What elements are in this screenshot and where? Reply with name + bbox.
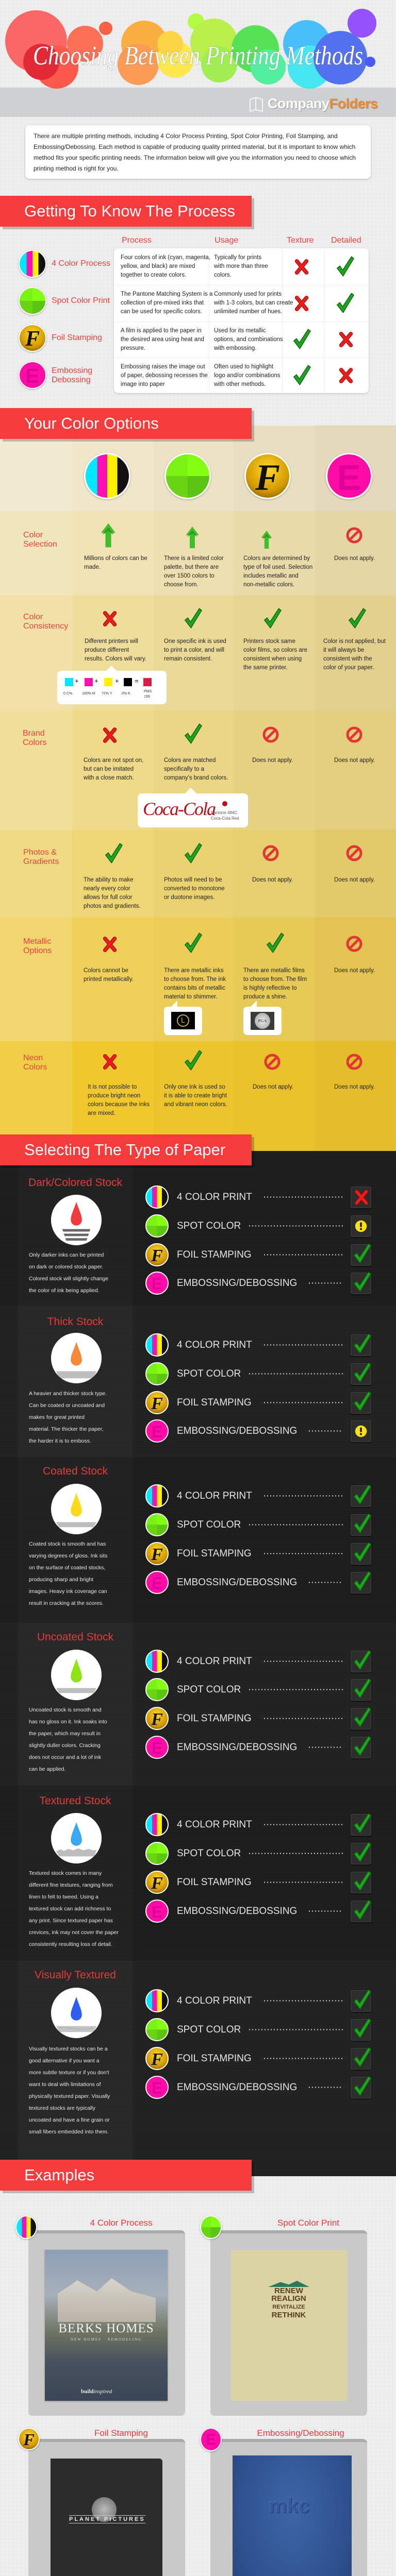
process comparison table: Commonly used for prints [214, 291, 282, 297]
process comparison table: with embossing. [214, 345, 256, 351]
row: brand colors: Does not apply. [334, 757, 375, 764]
process comparison table: Used for its metallic [214, 328, 266, 334]
paper: Textured Stock: EMBOSSING/DEBOSSING [177, 1906, 297, 1917]
paper: Visually Textured: FOIL STAMPING [177, 2053, 252, 2064]
example: Spot Color Print: REALIGN [271, 2294, 306, 2303]
row: photos & gradients: Photos will need to be [164, 877, 222, 883]
color option method icons [83, 452, 373, 501]
process comparison table: Embossing raises the image out [121, 364, 205, 370]
paper: Uncoated Stock: the paper, which may result in [29, 1731, 101, 1737]
row: neon colors: colors because the inks [88, 1101, 150, 1108]
paper: Textured Stock: FOIL STAMPING [177, 1877, 252, 1888]
row: neon colors: Does not apply. [253, 1084, 293, 1090]
process comparison table: The Pantone Matching System is a [121, 291, 212, 297]
paper: Visually Textured: textured stocks are typically [29, 2105, 95, 2111]
process row labels with icons: E [26, 365, 39, 387]
process row labels with icons: Debossing [52, 376, 91, 384]
paper: Coated Stock: 4 COLOR PRINT [177, 1490, 252, 1501]
row: brand colors: Does not apply. [252, 757, 293, 764]
paper: Thick Stock: makes for great printed [29, 1414, 85, 1420]
row: photos & gradients: Does not apply. [252, 877, 293, 883]
paper: Thick Stock: EMBOSSING/DEBOSSING [177, 1426, 297, 1436]
row: photos & gradients: The ability to make [84, 877, 134, 883]
row: metallic options: contains bits of metallic [164, 985, 225, 991]
paper: Uncoated Stock: F [151, 1710, 163, 1729]
paper: Visually Textured: good alternative if you want a [29, 2058, 100, 2064]
paper: Uncoated Stock: Uncoated Stock [37, 1631, 113, 1643]
paper: Uncoated Stock [29, 1631, 372, 1772]
process comparison table: options, and combinations [214, 336, 283, 343]
row: neon colors: it is able to create bright [164, 1093, 227, 1099]
table column headers: Usage [214, 236, 238, 245]
heading: Examples [0, 2160, 252, 2191]
process row labels with icons: Foil Stamping [52, 333, 102, 342]
paper: Coated Stock [29, 1465, 372, 1606]
process comparison table: with other methods. [214, 381, 266, 387]
row: photos & gradients: nearly every color [84, 886, 130, 892]
callout: CMYK mix to PMS 199: = [135, 677, 139, 685]
paper: Textured Stock: textured stock can add richness to [29, 1906, 111, 1912]
callout: Coca-Cola Pantone 484C: Pantone 484C [211, 810, 237, 815]
example: 4 Color Process: NEW HOMES · REMODELING [71, 2337, 142, 2342]
row: color consistency: remain consistent. [164, 656, 212, 662]
paper: Visually Textured: small fibers embedded into them. [29, 2129, 109, 2135]
paper: Thick Stock: Can be coated or uncoated and [29, 1402, 105, 1409]
row: color selection: non-metallic colors. [243, 582, 294, 588]
row: brand colors: Colors [23, 738, 46, 747]
paper: Thick Stock: the harder it is to emboss. [29, 1438, 91, 1444]
example: Embossing/Debossing [199, 2427, 367, 2576]
row: photos & gradients: Gradients [23, 857, 59, 866]
paper: Uncoated Stock: does not occur and a lot of ink [29, 1754, 101, 1760]
paper: Visually Textured [29, 1969, 372, 2135]
example: Foil Stamping: PLANET PICTURES [69, 2516, 145, 2522]
paper: Uncoated Stock: Uncoated stock is smooth and [29, 1707, 102, 1713]
row: color consistency: consistent with the [323, 656, 372, 662]
paper: Dark/Colored Stock: the color of ink being applied. [29, 1287, 100, 1294]
callout: Lexus metallic ink: L [181, 1016, 185, 1025]
paper: Dark/Colored Stock: Colored stock will slightly change [29, 1276, 108, 1282]
paper: Textured Stock [29, 1795, 372, 1947]
row: neon colors: are mixed. [88, 1110, 116, 1116]
paper: Dark/Colored Stock [28, 1177, 372, 1295]
row: metallic options: to choose from. The ink [164, 976, 226, 982]
paper: Dark/Colored Stock: Only darker inks can be printed [29, 1252, 104, 1258]
row: metallic options: printed metallically. [84, 976, 134, 982]
paper: Uncoated Stock: has no gloss on it. Ink soaks into [29, 1719, 107, 1725]
row: brand colors: Brand [23, 729, 45, 738]
process comparison table: the desired area using heat and [121, 336, 204, 343]
color option method icons: E [337, 457, 361, 498]
paper: Visually Textured: E [152, 2079, 162, 2097]
row: photos & gradients: allows for full color [84, 894, 133, 901]
row: color selection: type of foil used. Selection [243, 564, 312, 570]
callout: PGA foil: PGA [258, 1019, 267, 1023]
row: metallic options: Colors cannot be [84, 968, 128, 974]
paper: Thick Stock: E [152, 1422, 162, 1441]
row: color selection: There is a limited color [164, 555, 224, 562]
paper: Uncoated Stock: can be applied. [29, 1766, 65, 1772]
paper: Textured Stock: F [151, 1874, 163, 1893]
process comparison table: collection of pre-mixed inks that [121, 300, 204, 306]
paper: Uncoated Stock: FOIL STAMPING [177, 1713, 252, 1724]
intro text box: There are multiple printing methods, including 4 Color Process Printing, Spot Color Printing, Foil Stamping, and Embossing/Debossing. Each method is capable of producing quality printed material, but it is important to know which method fits your specific printing needs. The information below will give you the information you need to choose which printing method is right for you. [34, 132, 356, 172]
paper: Textured Stock: different fine textures, ranging from [29, 1882, 113, 1888]
heading: Your Color Options: Your Color Options [24, 414, 159, 432]
row: photos & gradients [23, 843, 375, 909]
row: neon colors: and vibrant neon colors. [164, 1101, 227, 1108]
row: brand colors [23, 723, 375, 781]
callout: Coca-Cola Pantone 484C: Coca-Cola [143, 799, 215, 819]
paper: Coated Stock: images. Heavy ink coverage can [29, 1588, 107, 1595]
process row labels with icons: F [25, 327, 40, 351]
row: brand colors: with a close match. [84, 775, 134, 781]
heading: Selecting The Type of Paper: Selecting The Type of Paper [24, 1141, 225, 1159]
example: Spot Color Print: REVITALIZE [272, 2304, 305, 2310]
row: photos & gradients: or duotone images. [164, 894, 214, 901]
paper: Thick Stock: SPOT COLOR [177, 1368, 241, 1379]
callout: CMYK mix to PMS 199: PMS [144, 690, 152, 693]
row: brand colors: company's brand colors. [164, 775, 228, 781]
logo: company folders header: CompanyFolders [268, 96, 378, 111]
example: Foil Stamping [17, 2427, 185, 2576]
paper: Visually Textured: 4 COLOR PRINT [177, 1995, 252, 2006]
example: Spot Color Print: RENEW [274, 2286, 303, 2295]
row: color consistency [23, 608, 386, 671]
paper: Visually Textured: SPOT COLOR [177, 2024, 241, 2035]
row: color consistency: color films, so colors are [243, 647, 307, 653]
paper: Thick Stock: Thick Stock [47, 1316, 103, 1328]
callout: CMYK mix to PMS 199: + [75, 677, 79, 685]
example: 4 Color Process [14, 2215, 185, 2416]
row: color selection: Selection [23, 540, 57, 549]
header: bubbles and title [0, 9, 396, 117]
row: color consistency: One specific ink is used [164, 638, 226, 645]
row: color consistency: results. Colors will vary. [85, 656, 146, 662]
heading: Your Color Options [0, 408, 252, 439]
row: neon colors: Neon [23, 1054, 43, 1062]
process comparison table: Typically for prints [214, 255, 261, 261]
row: color selection: choose from. [164, 582, 198, 588]
paper: Visually Textured: physically textured paper. Visually [29, 2093, 110, 2099]
row: color consistency: consistent when using [243, 656, 302, 662]
paper: Dark/Colored Stock: SPOT COLOR [177, 1221, 241, 1231]
process comparison table [114, 248, 369, 393]
row: color consistency: Different printers will [85, 638, 138, 645]
heading: Selecting The Type of Paper [0, 1134, 252, 1165]
row: color selection: includes metallic and [243, 573, 299, 579]
callout: Lexus metallic ink [164, 1007, 202, 1035]
example: 4 Color Process: BERKS HOMES [58, 2321, 154, 2335]
example: Spot Color Print [199, 2215, 367, 2416]
process comparison table: Four colors of ink (cyan, magenta, [121, 255, 210, 261]
process comparison table: logo and/or combinations [214, 372, 280, 379]
example: 4 Color Process: buildinspired [81, 2388, 112, 2395]
paper: Textured Stock: SPOT COLOR [177, 1848, 241, 1859]
row: brand colors: but can be imitated [84, 766, 134, 772]
row: color consistency: Printers stock same [243, 638, 295, 645]
paper: Coated Stock: result in cracking at the scores. [29, 1600, 104, 1606]
paper: Thick Stock: 4 COLOR PRINT [177, 1340, 252, 1350]
row: metallic options: Does not apply. [334, 968, 375, 974]
process comparison table: Often used to highlight [214, 364, 273, 370]
paper: Textured Stock: 4 COLOR PRINT [177, 1819, 252, 1830]
panel: paper section dark background [0, 1151, 396, 2176]
row: photos & gradients: converted to monotone [164, 886, 225, 892]
process comparison table: together to create colors. [121, 272, 186, 278]
table column headers: Texture [287, 236, 314, 245]
row: metallic options: There are metallic inks [164, 968, 224, 974]
row: color consistency: Color is not applied, but [323, 638, 386, 645]
row: brand colors: Colors are matched [164, 757, 216, 764]
paper: Textured Stock: consistently resulting loss of detail. [29, 1941, 112, 1947]
example: Foil Stamping: F [23, 2430, 35, 2449]
process row labels with icons: Spot Color Print [52, 296, 110, 305]
paper: Visually Textured: uncoated and have a fine grain or [29, 2117, 109, 2123]
paper: Uncoated Stock: E [152, 1739, 162, 1757]
paper: Thick Stock: material. The thicker the paper, [29, 1426, 104, 1432]
paper: Visually Textured: want to deal with limitations of [29, 2081, 101, 2088]
row: color consistency: to print a color, and will [164, 647, 224, 653]
example: Spot Color Print: RETHINK [272, 2311, 306, 2319]
row: metallic options [23, 933, 375, 1035]
paper: Textured Stock: E [152, 1903, 162, 1921]
process comparison table: A film is applied to the paper in [121, 328, 202, 334]
paper: Coated Stock: E [152, 1574, 162, 1592]
row: color selection: Does not apply. [334, 555, 375, 562]
row: color consistency: produce different [85, 647, 129, 653]
process row labels with icons: Embossing [52, 366, 92, 375]
row: photos & gradients: photos and gradients. [84, 903, 141, 909]
process comparison table: yellow, and black) are mixed [121, 263, 195, 269]
row: color selection: Millions of colors can be [84, 555, 147, 562]
heading: Examples: Examples [24, 2166, 94, 2184]
row: neon colors: It is not possible to [88, 1084, 137, 1090]
row: metallic options: There are metallic films [243, 968, 305, 974]
paper: Dark/Colored Stock: E [152, 1275, 162, 1293]
callout: Coca-Cola Pantone 484C: Coca-Cola Red [211, 816, 239, 821]
process comparison table: can be used for specific colors. [121, 309, 202, 315]
paper: Uncoated Stock: 4 COLOR PRINT [177, 1656, 252, 1667]
row: metallic options: to choose from. The film [243, 976, 307, 982]
paper: Coated Stock: EMBOSSING/DEBOSSING [177, 1577, 297, 1588]
process comparison table: unlimited number of hues. [214, 309, 282, 315]
paper: Uncoated Stock: SPOT COLOR [177, 1684, 241, 1695]
row: neon colors: Does not apply. [334, 1084, 375, 1090]
paper: Uncoated Stock: slightly duller colors. Cracking [29, 1742, 101, 1749]
row: color consistency: Consistency [23, 622, 68, 631]
example: Foil Stamping: Foil Stamping [94, 2428, 148, 2438]
row: color selection: palette, but there are [164, 564, 219, 570]
paper: Textured Stock: linen to felt to tweed. Using a [29, 1894, 98, 1900]
callout: CMYK mix to PMS 199: 72% Y [102, 692, 112, 696]
paper: Coated Stock: Coated Stock [43, 1465, 108, 1477]
paper: Thick Stock [29, 1316, 372, 1444]
example: Embossing/Debossing: E [206, 2431, 216, 2448]
row: color selection: made. [84, 564, 101, 570]
heading: Getting To Know The Process: Getting To Know The Process [24, 202, 235, 220]
paper: Textured Stock: Textured stock comes in many [29, 1870, 102, 1876]
row: photos & gradients: Does not apply. [334, 877, 375, 883]
heading: Getting To Know The Process [0, 196, 252, 227]
row: metallic options: produce a shine. [243, 994, 287, 1000]
panel: color options background [0, 426, 396, 1151]
row: color consistency: the same printer. [243, 665, 288, 671]
row: neon colors: produce bright neon [88, 1093, 140, 1099]
callout: CMYK mix to PMS 199: 0 C% [63, 692, 72, 696]
callout: PGA foil [243, 1007, 282, 1035]
row: color consistency: it will always be [323, 647, 364, 653]
callout: CMYK mix to PMS 199: 0% K [122, 692, 130, 696]
paper: Coated Stock: FOIL STAMPING [177, 1548, 252, 1559]
row: color consistency: color of your paper. [323, 665, 374, 671]
paper: Visually Textured: EMBOSSING/DEBOSSING [177, 2082, 297, 2093]
paper: Coated Stock: SPOT COLOR [177, 1519, 241, 1530]
paper: Coated Stock: F [151, 1545, 163, 1564]
process comparison table: colors. [214, 272, 232, 278]
callout: CMYK mix to PMS 199: + [115, 677, 119, 685]
paper: Visually Textured: Visually Textured [35, 1969, 116, 1981]
example: 4 Color Process: 4 Color Process [90, 2218, 152, 2228]
row: brand colors: specifically to a [164, 766, 204, 772]
paper: Visually Textured: Visually textured stocks can be a [29, 2046, 108, 2052]
row: brand colors: Colors are not spot on, [84, 757, 143, 764]
row: neon colors [23, 1050, 375, 1116]
paper: Coated Stock: varying degrees of gloss. Ink sits [29, 1553, 107, 1559]
process comparison table: with more than three [214, 263, 268, 269]
process comparison table: with 1-3 colors, but can create [214, 300, 293, 306]
paper: Dark/Colored Stock: Dark/Colored Stock [28, 1177, 122, 1189]
paper: Thick Stock: A heavier and thicker stock type. [29, 1391, 107, 1397]
process comparison table: image into paper [121, 381, 165, 387]
paper: Textured Stock: any print. Since textured paper has [29, 1918, 113, 1924]
paper: Coated Stock: producing sharp and bright [29, 1577, 93, 1583]
row: neon colors: Only one ink is used so [164, 1084, 225, 1090]
intro text box [25, 125, 371, 179]
row: metallic options: is highly reflective to [243, 985, 297, 991]
example: Embossing/Debossing: mkc [269, 2495, 310, 2517]
row: metallic options: material to shimmer. [164, 994, 218, 1000]
row: color selection: Color [23, 531, 43, 539]
paper: Coated Stock: Coated stock is smooth and has [29, 1541, 106, 1547]
process comparison table: of paper, debossing recesses the [121, 372, 208, 379]
table column headers: Detailed [331, 236, 361, 245]
table column headers: Process [122, 236, 152, 245]
process row labels with icons [18, 249, 110, 391]
table column headers [122, 236, 361, 245]
row: color selection: over 1500 colors to [164, 573, 214, 579]
paper: Dark/Colored Stock: 4 COLOR PRINT [177, 1192, 252, 1202]
row: metallic options: Options [23, 946, 52, 955]
row: neon colors: Colors [23, 1063, 47, 1072]
callout: CMYK mix to PMS 199: 199 [144, 695, 150, 699]
paper: Dark/Colored Stock: on dark or colored stock paper. [29, 1264, 103, 1270]
paper: Dark/Colored Stock: FOIL STAMPING [177, 1249, 252, 1260]
row: color selection: Colors are determined by [243, 555, 310, 562]
paper: Thick Stock: F [151, 1394, 163, 1413]
row: photos & gradients: Photos & [23, 848, 57, 857]
process row labels with icons: 4 Color Process [52, 259, 110, 268]
paper: Dark/Colored Stock: EMBOSSING/DEBOSSING [177, 1278, 297, 1289]
paper: Visually Textured: more subtle texture or if you don't [29, 2070, 109, 2076]
paper: Visually Textured: F [151, 2050, 163, 2069]
callout: CMYK mix to PMS 199: + [94, 677, 98, 685]
paper: Dark/Colored Stock: F [151, 1246, 163, 1265]
example: Embossing/Debossing: Embossing/Debossing [257, 2428, 344, 2438]
row: metallic options: Metallic [23, 937, 51, 946]
paper: Uncoated Stock: EMBOSSING/DEBOSSING [177, 1742, 297, 1753]
paper: Coated Stock: on the surface of coated stocks, [29, 1565, 105, 1571]
row: color selection [23, 523, 375, 588]
callout: CMYK mix to PMS 199: 100% M [82, 692, 95, 696]
example: Spot Color Print: Spot Color Print [277, 2218, 339, 2228]
paper: Thick Stock: FOIL STAMPING [177, 1397, 252, 1408]
callout: CMYK mix to PMS 199 [57, 671, 167, 704]
paper: Textured Stock: crevices, ink may not cover the paper [29, 1929, 119, 1936]
callout: Coca-Cola Pantone 484C [138, 793, 248, 827]
paper: Textured Stock: Textured Stock [40, 1795, 111, 1807]
process comparison table: pressure. [121, 345, 145, 351]
color option method icons: F [255, 457, 280, 498]
row: color consistency: Color [23, 613, 43, 621]
